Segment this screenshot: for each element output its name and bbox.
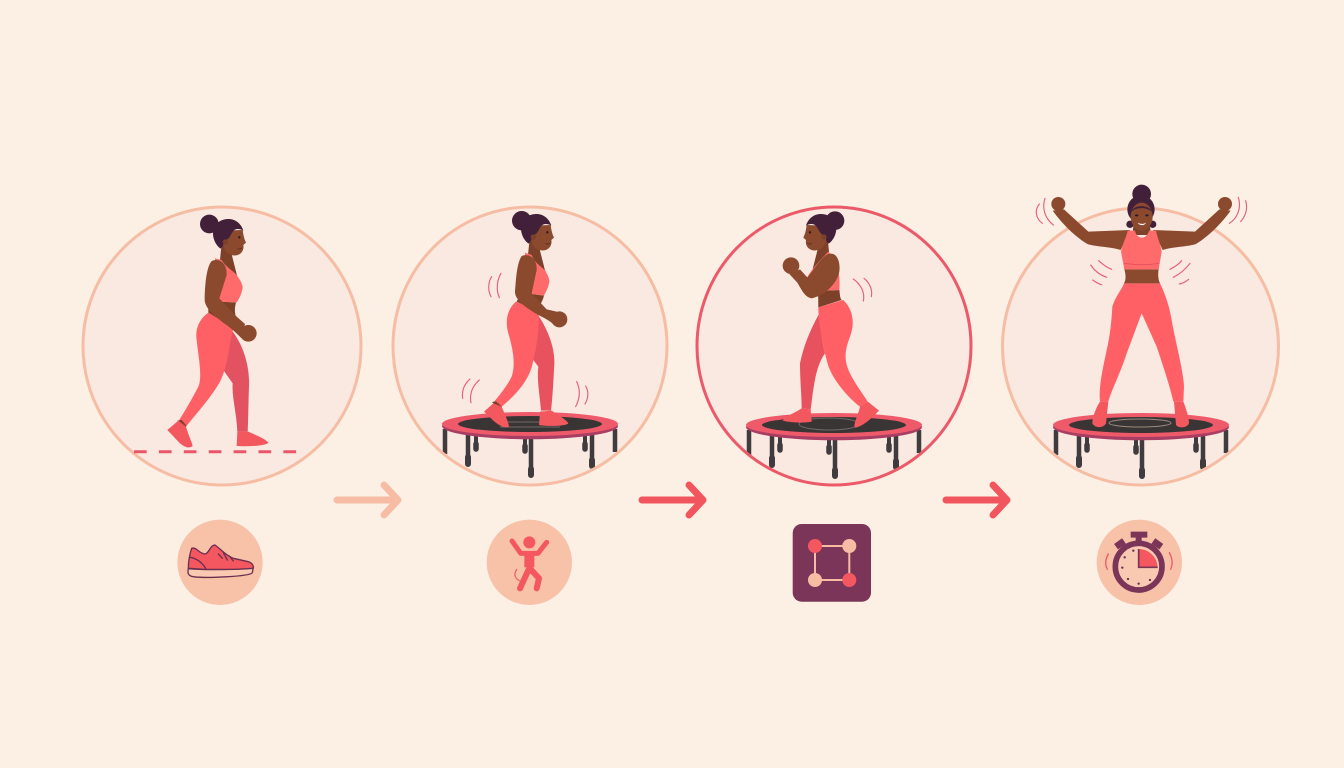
step 4 circle — [1002, 208, 1278, 485]
motion marks — [1036, 197, 1247, 285]
panel: step 4 jumping with arms raised — [1002, 185, 1278, 485]
motion marks — [462, 273, 588, 407]
step 1 circle — [83, 207, 361, 485]
panel: step 2 stepping on the trampoline — [393, 207, 667, 485]
trampoline — [1053, 413, 1229, 476]
panel: step 1 walking on the ground — [83, 207, 361, 485]
dashed ground line — [131, 450, 308, 453]
trampoline — [746, 413, 922, 476]
panel: step 3 marching on the trampoline — [697, 207, 971, 485]
icon: square of four connected dots — [793, 524, 871, 602]
figure: woman marching — [783, 211, 879, 428]
step 3 circle ring — [697, 207, 971, 485]
trampoline — [442, 412, 618, 475]
step 3 circle — [697, 207, 971, 485]
icon: sneaker — [177, 520, 263, 605]
step 2 circle — [393, 207, 667, 485]
figure: woman with arms raised — [1051, 185, 1232, 427]
step 4 circle ring — [1002, 208, 1278, 485]
figure: woman stepping — [484, 211, 568, 427]
icon: bouncing person — [487, 520, 572, 605]
step 2 circle ring — [393, 207, 667, 485]
figure: woman walking — [167, 215, 268, 447]
motion marks — [853, 278, 872, 301]
arrow: step 1 to step 2 — [337, 485, 398, 515]
arrow: step 3 to step 4 — [946, 485, 1007, 515]
arrow: step 2 to step 3 — [642, 485, 703, 515]
icon: stopwatch — [1097, 520, 1182, 605]
